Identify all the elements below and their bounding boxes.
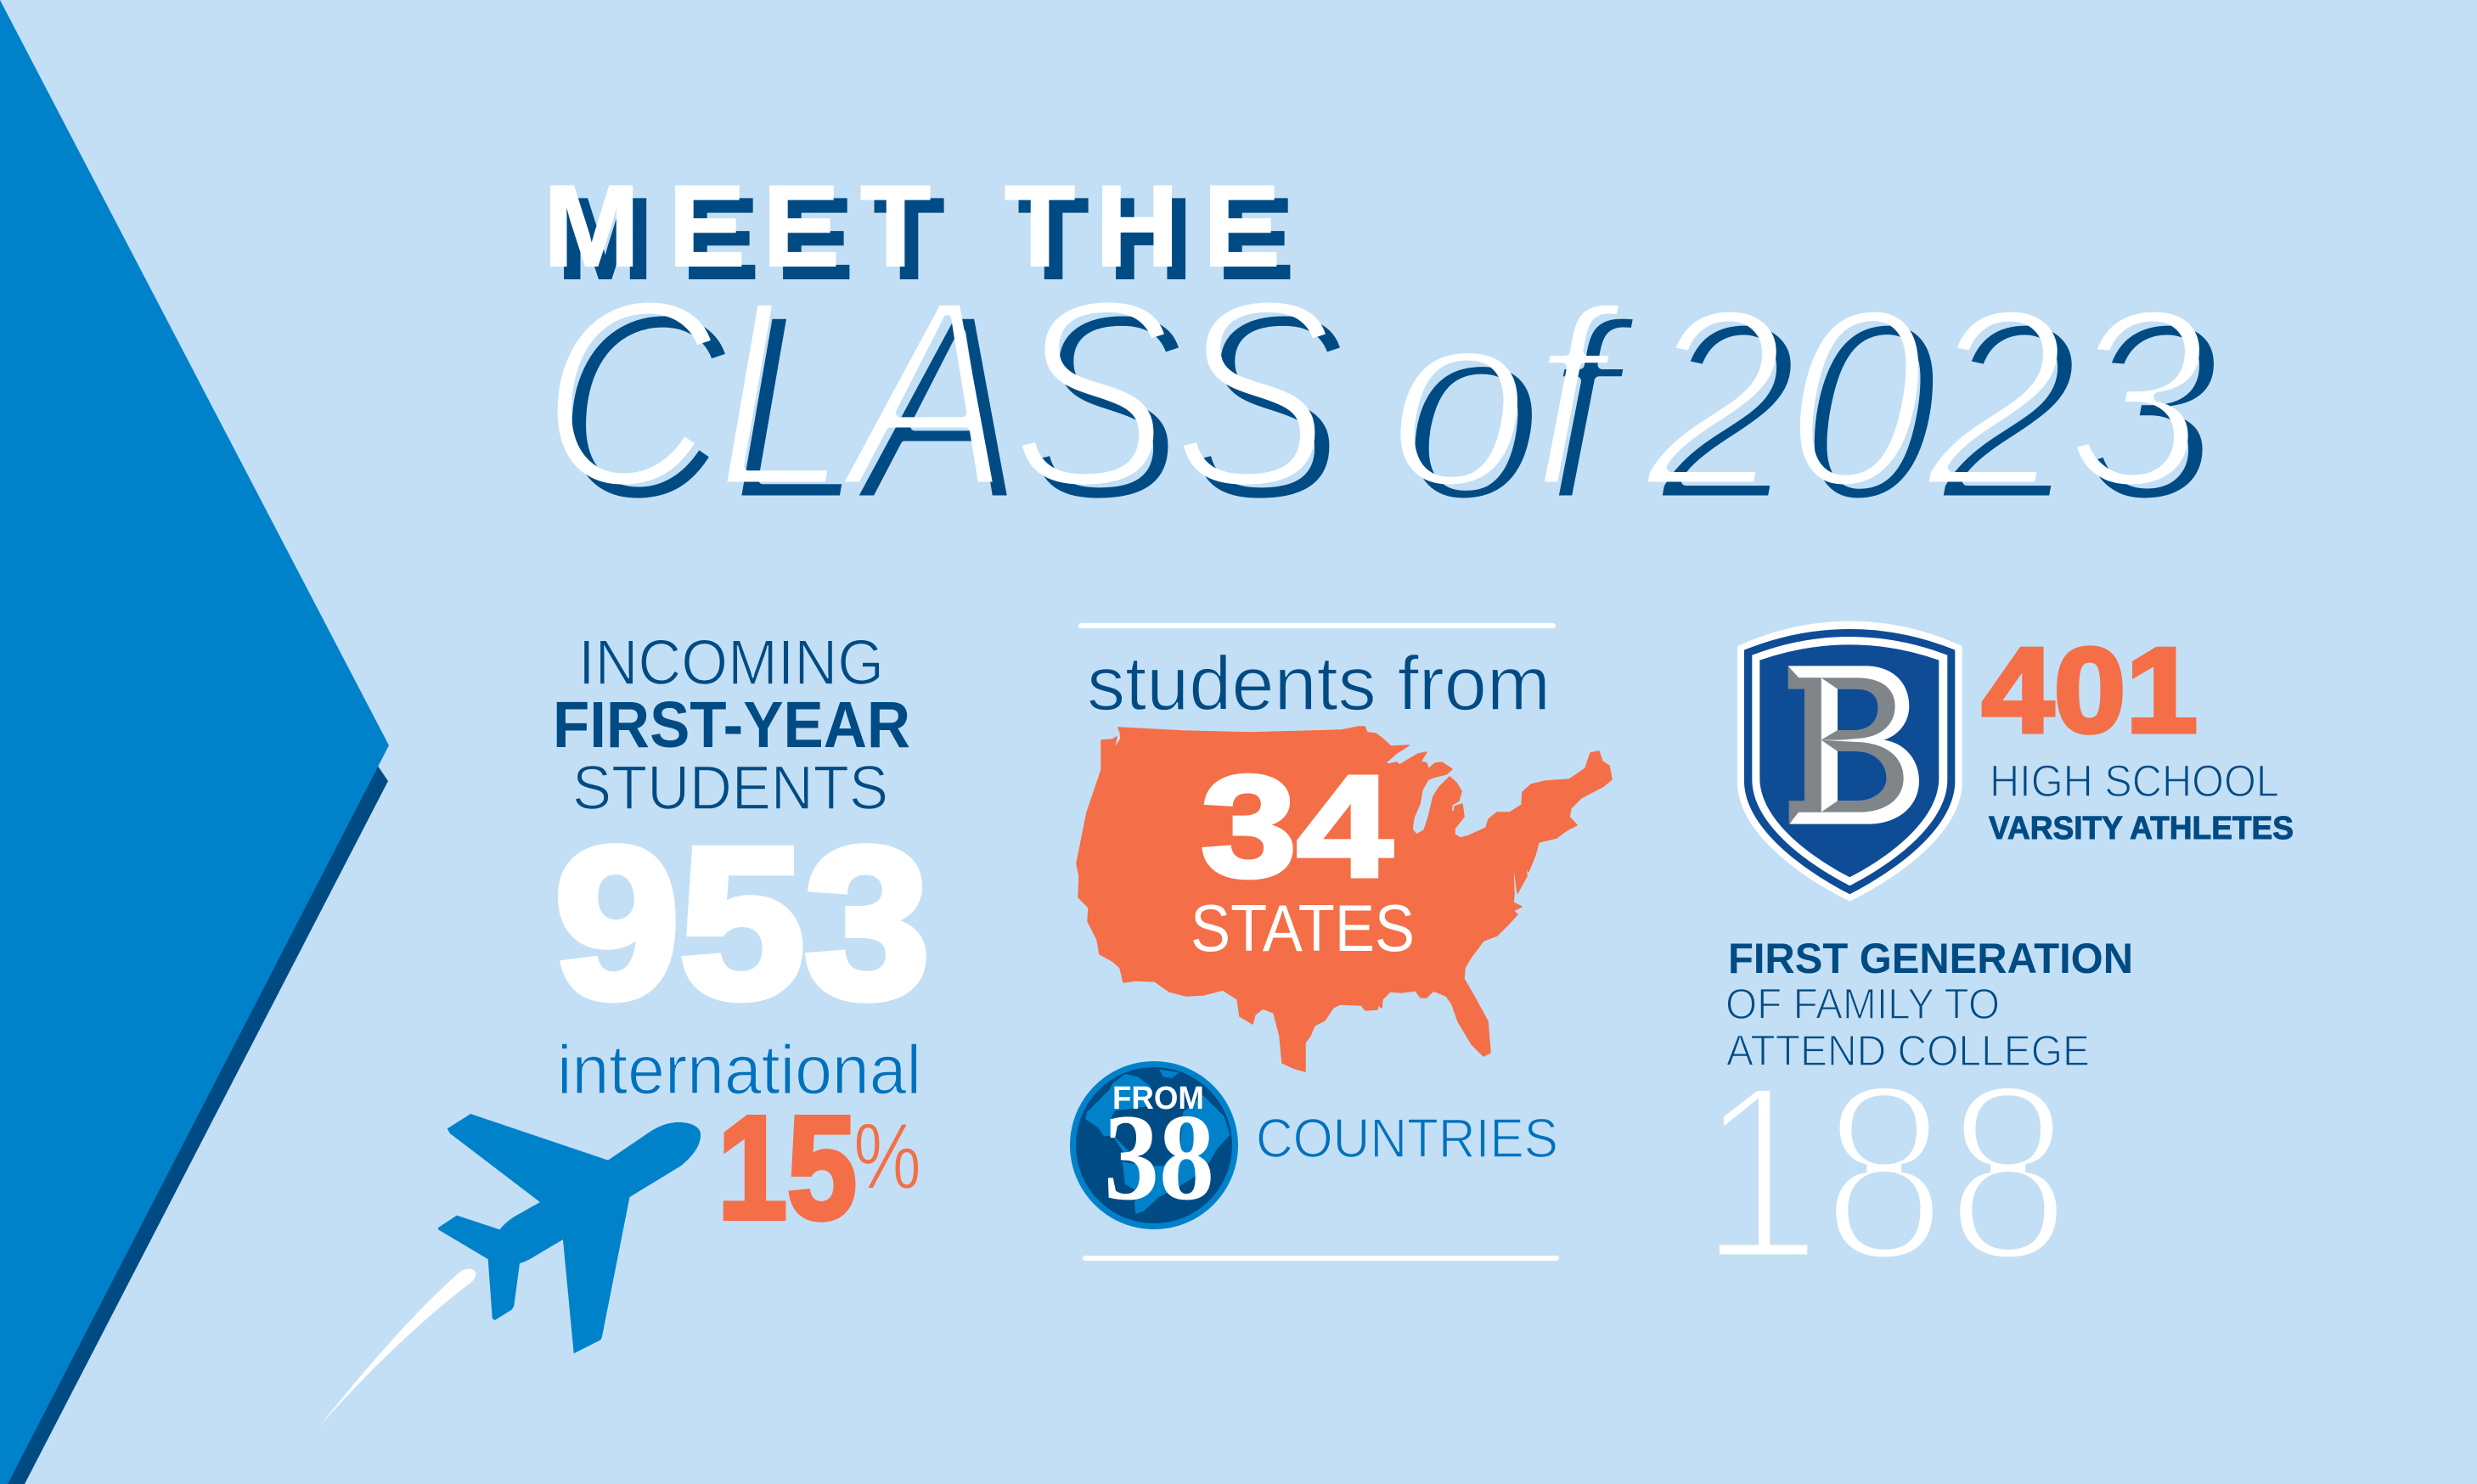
- panel: states and countries: [1070, 623, 1612, 1261]
- text: countries: COUNTRIES: [1256, 1107, 1558, 1169]
- text: high school: HIGH SCHOOL: [1990, 756, 2279, 807]
- text: states: STATES: [1191, 891, 1415, 965]
- title: class of 2023: 2023: [1640, 255, 2208, 541]
- text: of family to: OF FAMILY TO: [1725, 980, 2000, 1028]
- title: meet the: MEET THE: [557, 174, 1294, 303]
- panel: athletes: [1982, 623, 2294, 846]
- title: meet the: MEET THE: [543, 161, 1281, 290]
- number: 34: 34: [1201, 746, 1393, 908]
- title: class of 2023: of: [1402, 268, 1641, 554]
- text: international: international: [557, 1031, 921, 1109]
- chevron: [0, 0, 389, 1484]
- panel: first-year students: [553, 627, 930, 1250]
- chevron shadow: [0, 747, 388, 1484]
- number: 401: 401: [1982, 623, 2198, 758]
- title: class of 2023: [557, 302, 2214, 498]
- text: varsity athletes: VARSITY ATHLETES: [1989, 811, 2294, 846]
- number: 15: 15: [718, 1085, 857, 1250]
- title: class of 2023: of: [1388, 255, 1626, 541]
- panel: first generation: [1698, 935, 2133, 1313]
- text: first-year: FIRST-YEAR: [553, 689, 910, 762]
- icon: globe: [1070, 1061, 1238, 1229]
- icon: airplane: [320, 1114, 701, 1425]
- icon: shield logo: [1737, 621, 1962, 902]
- text: students from: students from: [1087, 642, 1551, 727]
- text: first generation: FIRST GENERATION: [1728, 935, 2133, 982]
- text: students: STUDENTS: [572, 754, 888, 823]
- text: from: FROM: [1112, 1081, 1204, 1116]
- text: attend college: ATTEND COLLEGE: [1726, 1026, 2090, 1075]
- number: 953: 953: [555, 804, 930, 1043]
- map: united states: [1077, 727, 1612, 1071]
- percent sign: %: [853, 1105, 921, 1209]
- number: 188: 188: [1698, 1031, 2070, 1313]
- title: class of 2023: 2023: [1654, 268, 2222, 554]
- title: class of 2023: CLASS: [555, 256, 1348, 558]
- text: incoming: INCOMING: [578, 627, 884, 698]
- number: 38: 38: [1104, 1088, 1214, 1226]
- title: class of 2023: CLASS: [540, 243, 1333, 544]
